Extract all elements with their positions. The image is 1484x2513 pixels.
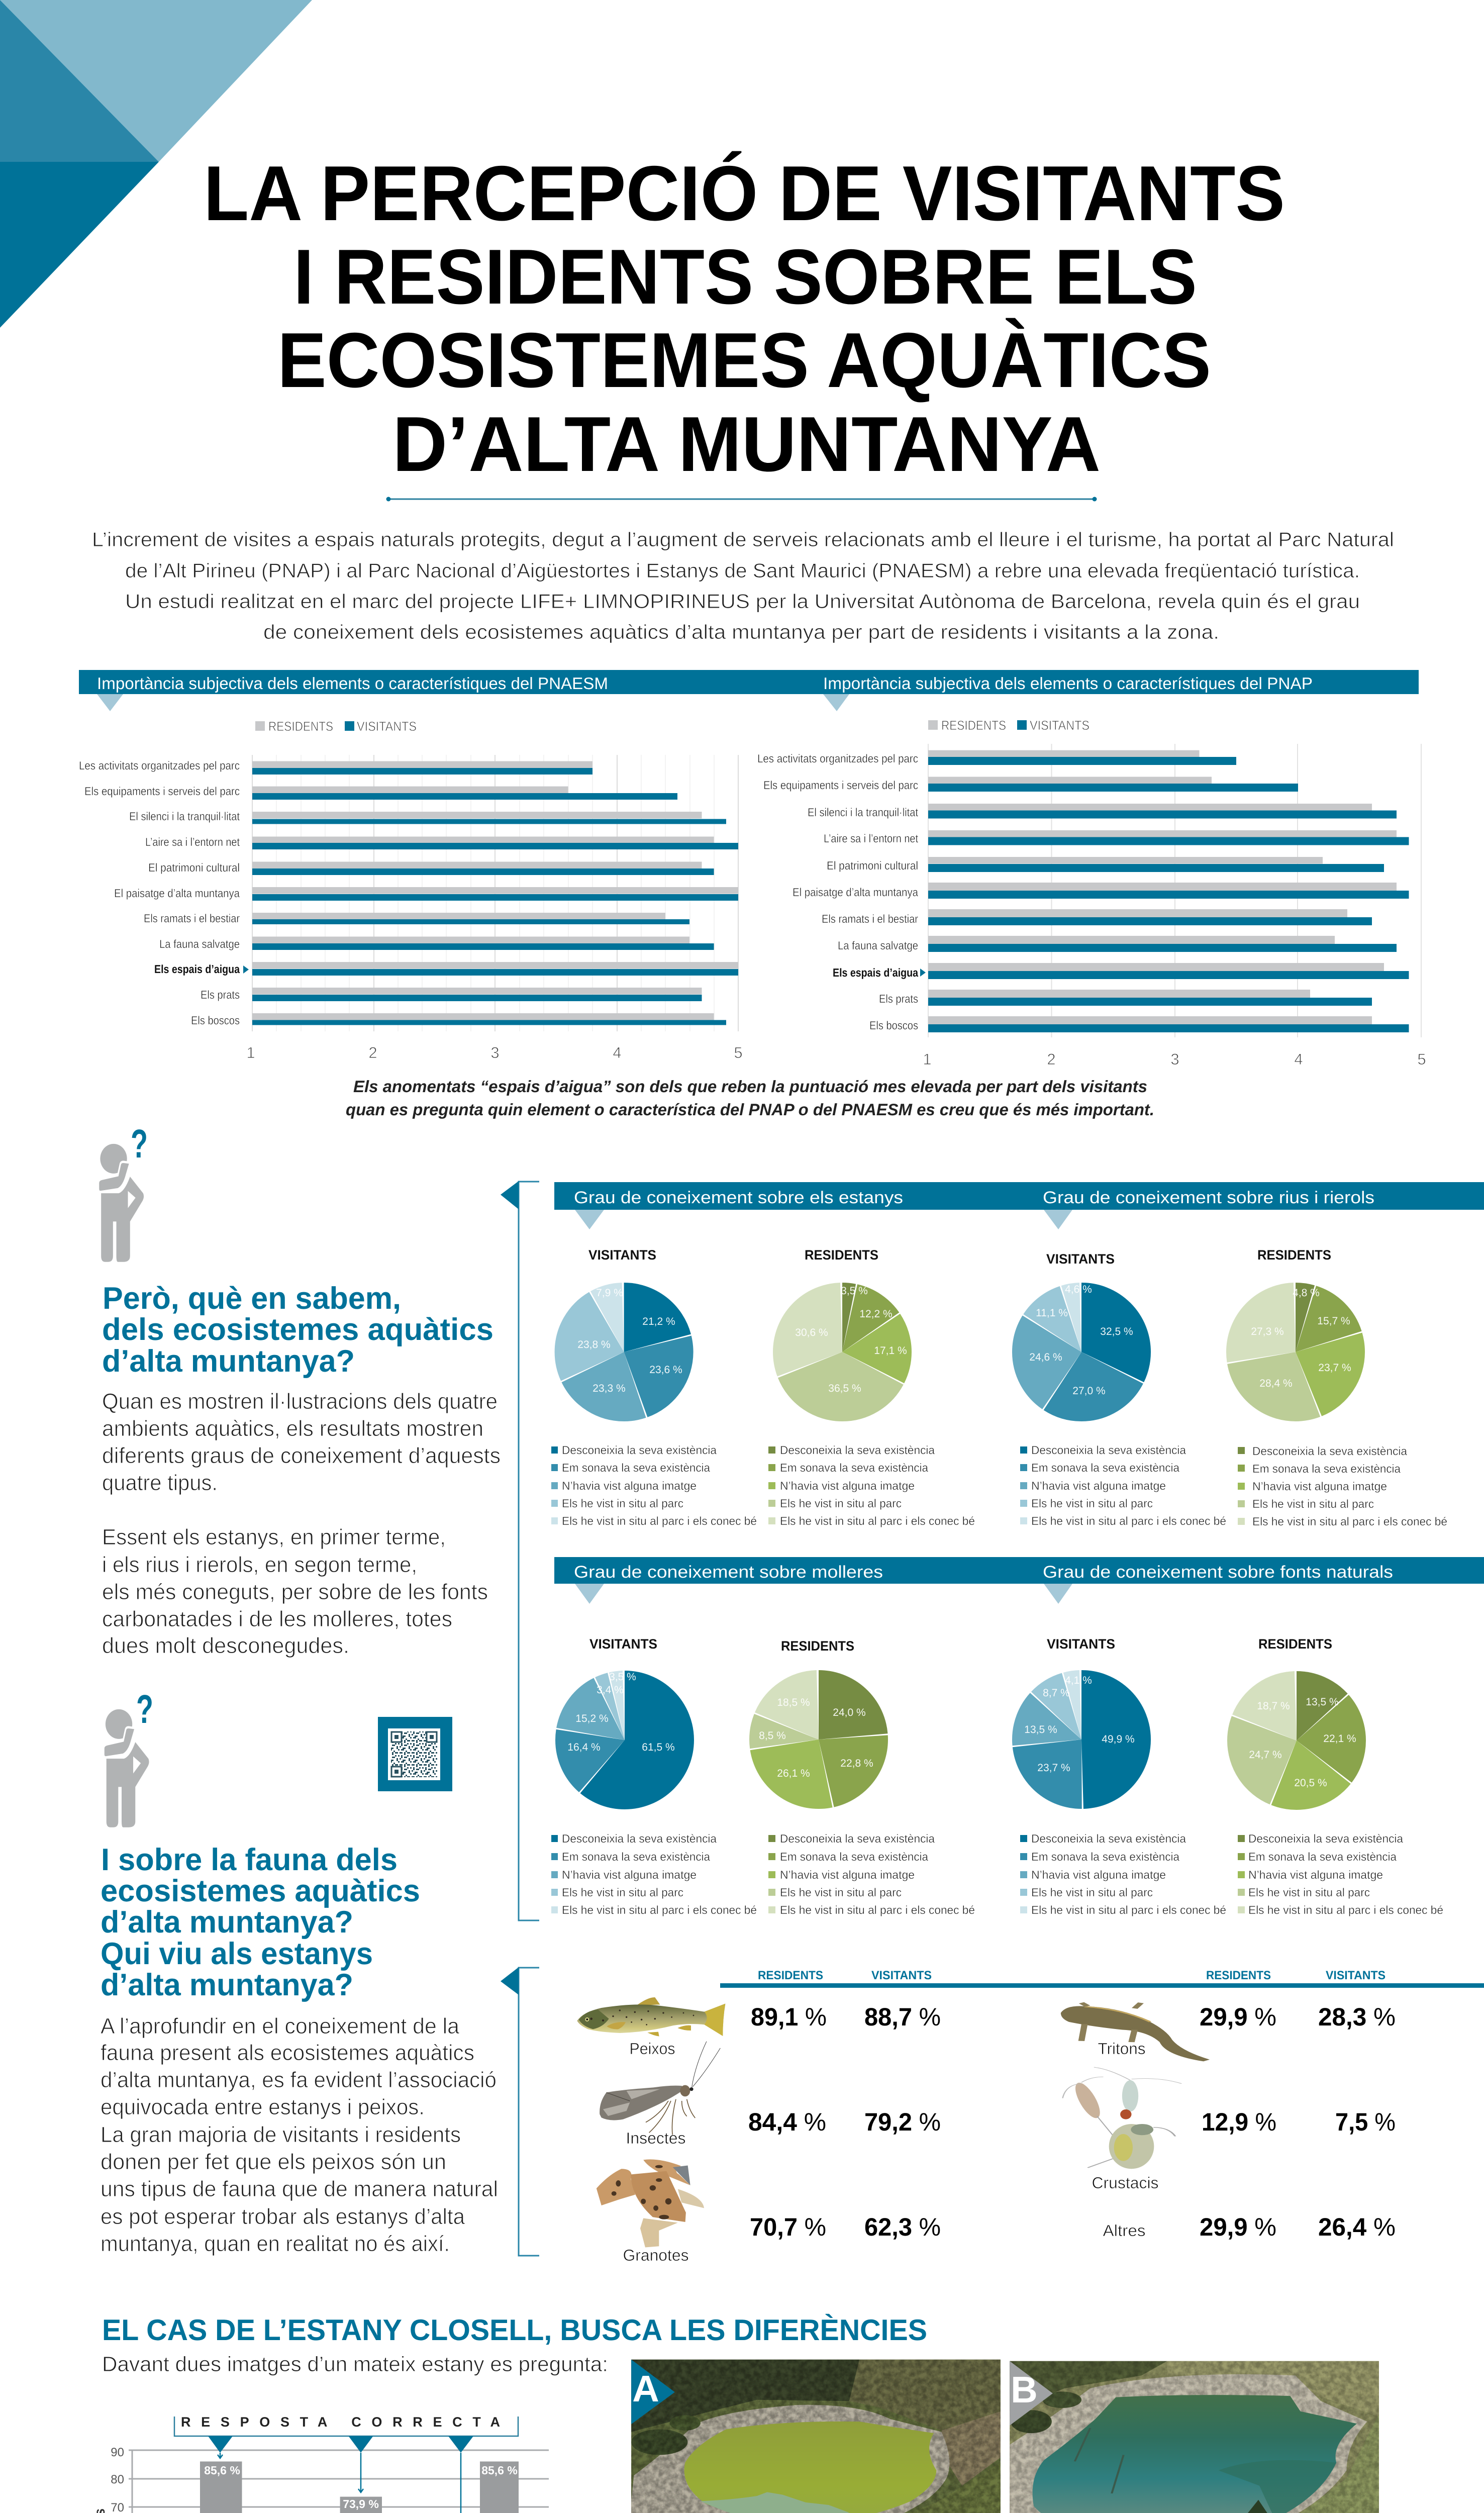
legend: estanys visitants: Desconeixia la seva existència <box>562 1443 717 1457</box>
legend: estanys visitants <box>551 1443 757 1527</box>
label: altres: Altres <box>1103 2221 1146 2240</box>
legend: rius visitants: Els he vist in situ al parc i els conec bé <box>1031 1514 1226 1527</box>
panel: pies molleres and fonts: VISITANTS <box>1047 1636 1115 1652</box>
text block: fauna: A l’aprofundir en el coneixement de la <box>101 2014 460 2039</box>
text block: coneixement: i els rius i rierols, en segon terme, <box>102 1553 417 1577</box>
legend: RESIDENTS <box>268 719 333 734</box>
pie chart: estanys residents <box>795 1285 907 1394</box>
text block: fauna: fauna present als ecosistemes aquàtics <box>101 2041 474 2065</box>
heading: Però, què en sabem: dels ecosistemes aquàtics <box>102 1312 493 1347</box>
panel: pies estanys and rius: Grau de coneixement sobre els estanys <box>574 1188 903 1207</box>
legend: molleres residents <box>768 1832 975 1916</box>
pie chart: rius visitants: 11,1 % <box>1036 1307 1068 1319</box>
pie chart: fonts residents: 20,5 % <box>1294 1777 1327 1789</box>
text block: fauna <box>101 2014 498 2256</box>
panel: fauna table: VISITANTS <box>871 1969 932 1982</box>
heading: fauna: ecosistemes aquàtics <box>101 1874 420 1908</box>
legend: molleres visitants: Em sonava la seva existència <box>562 1850 710 1863</box>
heading: Però, què en sabem: d’alta muntanya? <box>102 1344 355 1379</box>
text block: fauna: muntanya, quan en realitat no és així. <box>101 2232 450 2256</box>
bar chart: PNAP: Els ramats i el bestiar <box>822 912 918 925</box>
bars <box>162 2462 519 2513</box>
text block: fauna: es pot esperar trobar als estanys d’alta <box>101 2204 465 2229</box>
heading: Però, què en sabem <box>102 1281 493 1379</box>
percentages: 26,4 % <box>1318 2213 1396 2241</box>
heading: fauna: I sobre la fauna dels <box>101 1843 398 1877</box>
panel: pies molleres and fonts: Grau de coneixement sobre fonts naturals <box>1043 1563 1393 1582</box>
pie chart: fonts residents: 22,1 % <box>1323 1733 1356 1745</box>
legend: rius residents: Em sonava la seva existència <box>1252 1462 1401 1475</box>
legend: estanys residents: Els he vist in situ al parc i els conec bé <box>780 1514 975 1527</box>
icon: crustaceans <box>1063 2067 1181 2169</box>
pie chart: estanys visitants: 21,2 % <box>642 1316 675 1327</box>
text block: coneixement: carbonatades i de les molleres, totes <box>102 1607 452 1631</box>
percentages: 28,3 % <box>1318 2003 1396 2031</box>
panel: fauna table: RESIDENTS <box>1206 1969 1271 1982</box>
pie chart: estanys residents: 3,5 % <box>841 1285 868 1297</box>
title: I RESIDENTS SOBRE ELS <box>293 233 1197 320</box>
bar chart: PNAESM: 1 <box>246 1044 255 1061</box>
percentages: 29,9 % <box>1200 2003 1276 2031</box>
legend: fonts visitants: Em sonava la seva existència <box>1031 1850 1179 1863</box>
heading: fauna: d’alta muntanya? <box>101 1968 353 2002</box>
text block: fauna: equivocada entre estanys i peixos. <box>101 2095 425 2119</box>
text block: coneixement: diferents graus de coneixement d’aquests <box>102 1443 501 1468</box>
intro text: de coneixement dels ecosistemes aquàtics d’alta muntanya per part de residents i visitants a la zona. <box>263 621 1219 643</box>
legend: fonts residents <box>1238 1832 1443 1916</box>
percentages: 89,1 % <box>751 2003 827 2031</box>
pie chart: molleres residents: 8,5 % <box>759 1730 786 1742</box>
bar chart: PNAESM: Els ramats i el bestiar <box>144 912 240 925</box>
legend: estanys visitants: Els he vist in situ al parc <box>562 1497 683 1510</box>
pie chart: fonts visitants: 8,7 % <box>1043 1687 1070 1699</box>
photo: lake A <box>631 2360 1001 2513</box>
legend: fonts residents: Desconeixia la seva existència <box>1248 1832 1403 1845</box>
panel: pies estanys and rius: VISITANTS <box>1046 1251 1115 1267</box>
legend: molleres residents: Desconeixia la seva existència <box>780 1832 935 1845</box>
legend: molleres residents: N’havia vist alguna imatge <box>780 1868 915 1881</box>
pie chart: rius visitants <box>1029 1284 1133 1397</box>
legend: molleres visitants: N’havia vist alguna imatge <box>562 1868 697 1881</box>
bar chart: PNAESM: Les activitats organitzades pel parc <box>79 759 240 772</box>
panel: pies estanys and rius: Grau de coneixement sobre rius i rierols <box>1043 1188 1374 1207</box>
pie chart: molleres visitants: 61,5 % <box>642 1742 675 1753</box>
photo: lake B: B <box>1011 2369 1038 2410</box>
photo: lake A: A <box>632 2368 659 2409</box>
legend: VISITANTS <box>357 719 417 734</box>
caption: espais d'aigua: Els anomentats “espais d’aigua” son dels que reben la puntuació mes elevada per part dels visitants <box>353 1077 1147 1096</box>
caption: espais d'aigua <box>346 1077 1154 1119</box>
pie chart: rius visitants: 4,6 % <box>1065 1284 1092 1295</box>
intro text: L’increment de visites a espais naturals protegits, degut a l’augment de serveis relacionats amb el lleure i el turisme, ha portat al Parc Natural <box>92 529 1394 551</box>
label: insectes: Insectes <box>626 2129 685 2147</box>
panel: pies molleres and fonts: Grau de coneixement sobre molleres <box>574 1563 883 1582</box>
pie chart: estanys visitants <box>577 1287 682 1394</box>
panel: pies estanys and rius: VISITANTS <box>588 1247 656 1263</box>
title divider <box>386 497 1097 502</box>
legend: estanys residents: Els he vist in situ al parc <box>780 1497 902 1510</box>
legend: rius visitants <box>1020 1443 1226 1527</box>
bar chart: resposta correcta: 85,6 % <box>481 2464 518 2477</box>
panel: pies molleres and fonts <box>551 1557 1484 1916</box>
pie chart: fonts residents: 13,5 % <box>1306 1696 1339 1708</box>
legend: estanys visitants: N’havia vist alguna imatge <box>562 1479 697 1492</box>
heading: fauna: Qui viu als estanys <box>101 1937 373 1971</box>
legend: fonts visitants: N’havia vist alguna imatge <box>1031 1868 1166 1881</box>
panel: pies estanys and rius: RESIDENTS <box>805 1247 878 1263</box>
heading: Estany Closell: EL CAS DE L’ESTANY CLOSELL, BUSCA LES DIFERÈNCIES <box>102 2313 927 2347</box>
panel: fauna table: VISITANTS <box>1326 1969 1386 1982</box>
legend: fonts visitants: Els he vist in situ al parc i els conec bé <box>1031 1903 1226 1916</box>
intro text: de l’Alt Pirineu (PNAP) i al Parc Nacional d’Aigüestortes i Estanys de Sant Maurici (PNAESM) a rebre una elevada freqüentació turística. <box>125 560 1360 582</box>
legend: rius residents: N’havia vist alguna imatge <box>1252 1480 1387 1493</box>
bar chart: PNAP: Els espais d’aigua <box>833 966 918 979</box>
legend: estanys residents: Em sonava la seva existència <box>780 1461 928 1474</box>
legend: rius visitants: N’havia vist alguna imatge <box>1031 1479 1166 1492</box>
panel: fauna table <box>577 1969 1484 2264</box>
bar chart: resposta correcta: 73,9 % <box>343 2497 379 2510</box>
panel: pies estanys and rius: RESIDENTS <box>1257 1247 1331 1263</box>
legend: molleres visitants: Desconeixia la seva existència <box>562 1832 717 1845</box>
pie chart: molleres visitants <box>567 1671 675 1775</box>
panel: pies molleres and fonts: VISITANTS <box>589 1636 657 1652</box>
pie chart: estanys visitants: 23,6 % <box>649 1364 682 1376</box>
bar chart: PNAP: Les activitats organitzades pel parc <box>757 752 918 765</box>
bar chart: PNAP: Els equipaments i serveis del parc <box>763 779 918 792</box>
legend: fonts visitants: Els he vist in situ al parc <box>1031 1886 1153 1899</box>
percentages: 79,2 % <box>864 2108 941 2136</box>
legend: estanys visitants: Em sonava la seva existència <box>562 1461 710 1474</box>
icon: thinking person 2: ? <box>136 1687 153 1731</box>
percentages: 88,7 % <box>864 2003 941 2031</box>
text block: coneixement: Quan es mostren il·lustracions dels quatre <box>102 1389 498 1414</box>
label: crustacis: Crustacis <box>1092 2174 1159 2192</box>
legend: estanys residents: Desconeixia la seva existència <box>780 1443 935 1457</box>
legend: molleres residents: Em sonava la seva existència <box>780 1850 928 1863</box>
panel: pies molleres and fonts: RESIDENTS <box>781 1638 854 1654</box>
pie chart: fonts visitants: 13,5 % <box>1024 1724 1057 1735</box>
pie chart: rius visitants: 24,6 % <box>1029 1351 1062 1363</box>
bar chart: PNAP: El paisatge d’alta muntanya <box>793 886 918 899</box>
intro text <box>92 529 1394 643</box>
pie chart: molleres visitants: 16,4 % <box>567 1742 601 1753</box>
text block: fauna: donen per fet que els peixos són un <box>101 2150 446 2174</box>
bar chart: PNAESM: 5 <box>734 1044 743 1061</box>
caption: espais d'aigua: quan es pregunta quin element o característica del PNAP o del PNAESM es creu que és més important. <box>346 1100 1154 1119</box>
heading: fauna <box>101 1843 420 2002</box>
bar chart: PNAP: El patrimoni cultural <box>827 859 918 872</box>
bar chart: PNAESM: El silenci i la tranquil·litat <box>129 810 240 823</box>
pie chart: rius residents <box>1251 1287 1351 1389</box>
label: peixos: Peixos <box>629 2040 675 2058</box>
panel: importance charts header: Importància subjectiva dels elements o característiques del PNAP <box>823 674 1313 693</box>
bar chart: PNAP: 1 <box>923 1050 932 1068</box>
text block: fauna: uns tipus de fauna que de manera natural <box>101 2177 498 2201</box>
legend: molleres residents: Els he vist in situ al parc i els conec bé <box>780 1903 975 1916</box>
bar chart: PNAP: Els boscos <box>869 1019 918 1032</box>
pie chart: rius residents: 23,7 % <box>1318 1362 1351 1374</box>
label: tritons: Tritons <box>1098 2040 1146 2058</box>
legend: rius residents <box>1238 1444 1447 1528</box>
icon: newt <box>1061 2003 1210 2061</box>
bar chart: PNAP: L’aire sa i l’entorn net <box>824 832 919 845</box>
percentages: 62,3 % <box>864 2213 941 2241</box>
text block: coneixement <box>102 1389 501 1658</box>
pie chart: estanys visitants: 23,8 % <box>577 1339 611 1350</box>
panel: importance charts header: Importància subjectiva dels elements o característiques del PNAESM <box>97 674 608 693</box>
bracket: fauna panel <box>501 1967 539 2256</box>
bar chart: PNAESM <box>79 719 743 1061</box>
panel: fauna table: RESIDENTS <box>758 1969 823 1982</box>
pie chart: rius visitants: 27,0 % <box>1072 1385 1106 1397</box>
bar chart: PNAP: 5 <box>1417 1050 1426 1068</box>
bar chart: PNAP <box>757 718 1426 1068</box>
pie chart: rius residents: 28,4 % <box>1259 1378 1293 1389</box>
icon: insect <box>600 2042 720 2136</box>
arrows <box>208 2436 473 2513</box>
pie chart: molleres residents: 24,0 % <box>833 1707 866 1718</box>
bar chart: resposta correcta: 90 <box>111 2446 124 2459</box>
bar chart: PNAP: 2 <box>1047 1050 1056 1068</box>
intro text: Un estudi realitzat en el marc del projecte LIFE+ LIMNOPIRINEUS per la Universitat Autònoma de Barcelona, revela quin és el grau <box>125 591 1360 613</box>
percentages <box>748 2003 1396 2241</box>
panel: importance charts header <box>79 670 1419 711</box>
bar chart: PNAESM: Els boscos <box>191 1014 240 1027</box>
heading: Però, què en sabem: Però, què en sabem, <box>103 1281 401 1316</box>
text block: coneixement: els més coneguts, per sobre de les fonts <box>102 1580 488 1604</box>
pie chart: estanys residents: 17,1 % <box>874 1345 907 1357</box>
bar chart: resposta correcta <box>92 2414 549 2513</box>
legend: estanys residents: N’havia vist alguna imatge <box>780 1479 915 1492</box>
legend: molleres visitants: Els he vist in situ al parc <box>562 1886 683 1899</box>
text block: coneixement: ambients aquàtics, els resultats mostren <box>102 1416 483 1441</box>
legend: fonts residents: Em sonava la seva existència <box>1248 1850 1397 1863</box>
pie chart: rius residents: 27,3 % <box>1251 1326 1284 1337</box>
bracket: resposta correcta: RESPOSTA CORRECTA <box>181 2414 500 2430</box>
legend: molleres visitants <box>551 1832 757 1916</box>
legend: molleres residents: Els he vist in situ al parc <box>780 1886 902 1899</box>
bar chart: PNAP: La fauna salvatge <box>838 939 918 952</box>
bar chart: PNAP: 4 <box>1294 1050 1303 1068</box>
legend: rius residents: Els he vist in situ al parc <box>1252 1497 1374 1510</box>
pie chart: estanys visitants: 23,3 % <box>592 1383 626 1394</box>
pie chart: molleres residents: 22,8 % <box>840 1758 873 1769</box>
pie chart: fonts visitants: 23,7 % <box>1037 1762 1070 1774</box>
photo: lake B <box>1010 2361 1379 2513</box>
pie chart: rius residents: 15,7 % <box>1317 1315 1350 1327</box>
pie chart: fonts visitants: 4,1 % <box>1065 1675 1092 1686</box>
bar chart: PNAESM: Els equipaments i serveis del parc <box>84 785 240 798</box>
icon: thinking person: ? <box>131 1121 148 1166</box>
bar chart: PNAESM: Els prats <box>201 988 240 1001</box>
legend: fonts residents: Els he vist in situ al parc <box>1248 1886 1370 1899</box>
percentages: 7,5 % <box>1335 2108 1396 2136</box>
percentages: 12,9 % <box>1202 2108 1276 2136</box>
subheading: question: Davant dues imatges d’un mateix estany es pregunta: <box>102 2352 608 2376</box>
text block: coneixement: Essent els estanys, en primer terme, <box>102 1525 446 1550</box>
bar chart: resposta correcta: 80 <box>111 2473 124 2486</box>
bracket: resposta correcta <box>174 2414 518 2436</box>
bar chart: PNAESM: 2 <box>368 1044 377 1061</box>
legend: rius visitants: Els he vist in situ al parc <box>1031 1497 1153 1510</box>
pie chart: rius visitants: 32,5 % <box>1100 1326 1133 1337</box>
pie chart: estanys residents: 36,5 % <box>828 1383 861 1394</box>
legend: rius visitants: Em sonava la seva existència <box>1031 1461 1179 1474</box>
panel: pies estanys and rius <box>551 1182 1484 1528</box>
title: LA PERCEPCIÓ DE VISITANTS <box>204 150 1285 237</box>
bar chart: PNAESM: 3 <box>490 1044 500 1061</box>
title: ECOSISTEMES AQUÀTICS <box>277 317 1211 404</box>
pie chart: molleres visitants: 15,2 % <box>575 1713 609 1724</box>
percentages: 29,9 % <box>1200 2213 1276 2241</box>
bar chart: PNAESM: 4 <box>613 1044 622 1061</box>
percentages: 70,7 % <box>750 2213 826 2241</box>
bar chart: PNAESM: El patrimoni cultural <box>148 861 240 874</box>
percentages: 84,4 % <box>748 2108 826 2136</box>
text block: fauna: La gran majoria de visitants i residents <box>101 2122 461 2147</box>
bar chart: PNAESM: L’aire sa i l’entorn net <box>145 835 240 848</box>
pie chart: molleres visitants: 3,4 % <box>597 1684 624 1696</box>
pie chart: estanys residents: 12,2 % <box>859 1308 893 1320</box>
title: D’ALTA MUNTANYA <box>392 401 1101 488</box>
legend: fonts visitants <box>1020 1832 1226 1916</box>
heading: fauna: d’alta muntanya? <box>101 1905 353 1940</box>
bar chart: PNAESM: La fauna salvatge <box>159 937 240 950</box>
legend <box>928 718 1090 733</box>
pie chart: estanys residents: 30,6 % <box>795 1327 828 1338</box>
icon: thinking person 2 <box>104 1687 153 1827</box>
pie chart: fonts residents: 24,7 % <box>1249 1749 1282 1761</box>
legend: rius residents: Els he vist in situ al parc i els conec bé <box>1252 1515 1447 1528</box>
corner triangles decoration <box>0 0 312 328</box>
bar chart: resposta correcta: 85,6 % <box>204 2464 240 2477</box>
pie chart: molleres residents: 26,1 % <box>777 1768 810 1779</box>
title <box>204 150 1285 488</box>
pie chart: molleres residents <box>759 1697 873 1779</box>
bar chart: PNAP: 3 <box>1170 1050 1179 1068</box>
panel: pies molleres and fonts: RESIDENTS <box>1258 1636 1332 1652</box>
bar chart: PNAESM: Els espais d’aigua <box>154 962 240 976</box>
pie chart: fonts residents: 18,7 % <box>1257 1700 1290 1712</box>
text block: coneixement: quatre tipus. <box>102 1471 218 1495</box>
legend: fonts visitants: Desconeixia la seva existència <box>1031 1832 1186 1845</box>
legend: estanys visitants: Els he vist in situ al parc i els conec bé <box>562 1514 757 1527</box>
bar chart: PNAP: El silenci i la tranquil·litat <box>808 806 919 819</box>
bar chart: PNAESM: El paisatge d’alta muntanya <box>114 887 240 900</box>
legend: rius visitants: Desconeixia la seva existència <box>1031 1443 1186 1457</box>
bar chart: PNAP: Els prats <box>879 992 918 1005</box>
pie chart: molleres visitants: 3,5 % <box>609 1671 636 1683</box>
legend: RESIDENTS <box>941 718 1006 733</box>
pie chart: rius residents: 4,8 % <box>1293 1287 1320 1299</box>
pie chart: fonts residents <box>1249 1696 1356 1789</box>
bracket: pie charts panel <box>501 1181 539 1920</box>
pie chart: estanys visitants: 7,9 % <box>596 1287 623 1299</box>
legend <box>255 719 417 734</box>
pie chart: molleres residents: 18,5 % <box>777 1697 810 1708</box>
text block: coneixement: dues molt desconegudes. <box>102 1633 349 1658</box>
legend: fonts residents: Els he vist in situ al parc i els conec bé <box>1248 1903 1443 1916</box>
legend: estanys residents <box>768 1443 975 1527</box>
icon: trout <box>577 1997 725 2037</box>
legend: molleres visitants: Els he vist in situ al parc i els conec bé <box>562 1903 757 1916</box>
pie chart: fonts visitants: 49,9 % <box>1102 1733 1135 1745</box>
icon: frog <box>597 2159 704 2247</box>
legend: rius residents: Desconeixia la seva existència <box>1252 1444 1407 1458</box>
icon: thinking person <box>98 1121 148 1262</box>
pie chart: fonts visitants <box>1024 1675 1135 1774</box>
icon: QR code <box>378 1717 452 1791</box>
legend: fonts residents: N’havia vist alguna imatge <box>1248 1868 1383 1881</box>
label: granotes: Granotes <box>623 2246 688 2264</box>
text block: fauna: d’alta muntanya, es fa evident l’associació <box>101 2068 497 2092</box>
legend: VISITANTS <box>1030 718 1090 733</box>
